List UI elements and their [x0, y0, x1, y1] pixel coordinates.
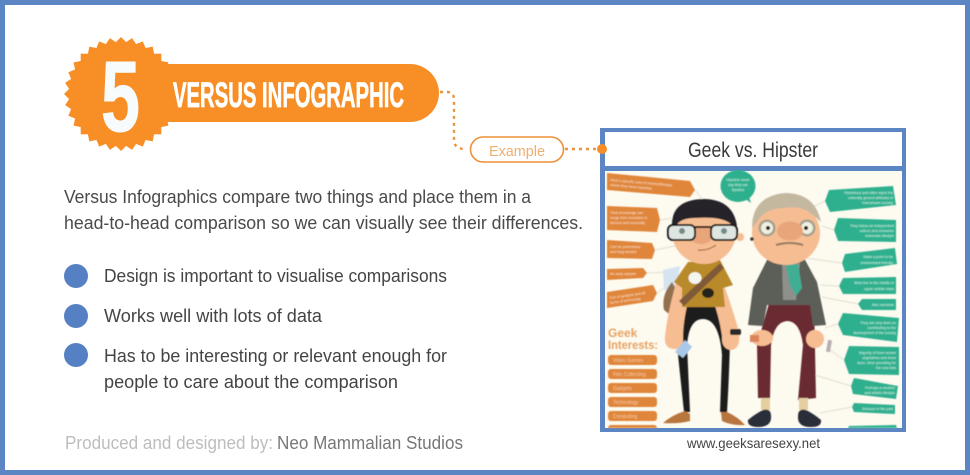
geek interests list: Geek [608, 326, 638, 340]
example pill [470, 137, 564, 162]
bullet 2: Works well with lots of data [104, 306, 323, 326]
green label text: the new kids [876, 366, 896, 370]
example frame: Geek vs. Hipster [600, 128, 906, 432]
green label text: They are very keen on [860, 321, 896, 325]
moustache [776, 243, 803, 245]
phone [675, 340, 692, 358]
geek interests list: Gadgets [613, 386, 632, 392]
geek character [663, 199, 745, 425]
speech bubble: Hipsters never [726, 178, 750, 182]
left arm and hand [665, 283, 690, 349]
geek interests list: Computing [613, 414, 637, 420]
green label text: keen, other providing for [857, 361, 897, 365]
orange label text: range from mundane to [610, 216, 647, 220]
orange label text: forms of technology [610, 297, 641, 305]
green label text: Arts overdose [872, 303, 894, 307]
title text: VERSUS INFOGRAPHIC [173, 76, 404, 115]
orange label text: Their knowledge can [610, 211, 643, 215]
orange label text: Can be pretentious [610, 245, 641, 249]
green label text: bohemian lifestyle [865, 234, 894, 238]
green label text: Make a point to be [863, 255, 893, 259]
speech bubble: say they are [728, 183, 748, 187]
green label text: contributing to the [867, 326, 896, 330]
earring [750, 237, 754, 241]
green label text: development of the society [853, 331, 896, 335]
example source url: www.geeksaresexy.net [686, 435, 820, 451]
orange geek labels [607, 173, 695, 308]
starburst badge [64, 37, 178, 151]
example pill: Example [489, 143, 545, 160]
speech bubble: hipsters [732, 188, 744, 192]
bullet 2 [64, 304, 323, 328]
dotted connector from pill to example frame [565, 148, 597, 150]
hair [752, 193, 821, 228]
green label text: Dresses in the past [862, 407, 893, 411]
legs [677, 305, 730, 412]
intro paragraph: head-to-head comparison so we can visually see their differences. [64, 213, 583, 233]
credit line: Neo Mammalian Studios [277, 433, 463, 453]
green label text: mainstream society [862, 201, 893, 205]
shirt [674, 260, 733, 307]
orange label text: famous and unusually [610, 221, 645, 225]
orange label text [610, 178, 672, 305]
credit line: Produced and designed by: [65, 433, 273, 453]
orange label text: An early adopter [610, 272, 637, 276]
geek interests list: Film Collecting [613, 372, 646, 378]
shoes [748, 410, 771, 427]
intro paragraph: Versus Infographics compare two things and place them in a [64, 187, 532, 207]
green hipster labels [825, 186, 899, 428]
bag and tablet [663, 266, 680, 290]
bullet list [64, 264, 447, 392]
orange label text: Fan of gadgets and all [610, 291, 646, 300]
green label text: Portrays a creative [865, 386, 895, 390]
green label text: vegetables and show [862, 356, 896, 360]
green label text: culture and consumer [859, 229, 895, 233]
speech bubble [720, 170, 756, 203]
green label text: They follow an independent [850, 224, 894, 228]
bullet 1: Design is important to visualise comparisons [104, 266, 447, 286]
credit line [65, 433, 463, 453]
green label text: culturally ground attitudes of [848, 196, 893, 200]
green label text: Most live in the middle or [854, 281, 895, 285]
bullet 3 [64, 343, 447, 392]
watch [730, 329, 741, 335]
example title: Geek vs. Hipster [688, 139, 818, 162]
orange label text: and long-winded [610, 250, 636, 254]
badge number: 5 [101, 41, 140, 153]
intro paragraph [64, 187, 583, 233]
title bar [130, 64, 439, 122]
green label text: Majority of them review [859, 351, 896, 355]
hair [672, 199, 737, 226]
shoes [663, 411, 690, 423]
green label text: and artistic lifestyle [865, 391, 895, 395]
right arm and hand [712, 285, 739, 350]
pants [757, 300, 816, 400]
illustration artwork [607, 170, 899, 428]
green label text [844, 191, 897, 411]
geek interests list: Technology [613, 400, 639, 406]
hands [751, 330, 773, 346]
green label text: environment friendly [861, 261, 893, 265]
geek interests list [608, 326, 658, 428]
hipster character [748, 193, 832, 427]
bullet 3: Has to be interesting or relevant enough for [104, 346, 447, 366]
orange label text: Have a specific area of interest/lifestyle [610, 178, 672, 187]
orange label text: where they have expertise [610, 183, 652, 191]
nose [689, 226, 713, 244]
geek interests list: Interests: [608, 338, 658, 352]
t-shirt and scarf [782, 263, 800, 300]
strap and panda [679, 263, 724, 306]
header: number badge and title bar [64, 37, 439, 153]
mouth [698, 245, 716, 250]
nose [777, 222, 803, 240]
socks [761, 398, 770, 410]
eyes [758, 220, 776, 236]
green label text: upper middle class [864, 287, 894, 291]
dotted connector from title to example pill [440, 92, 465, 149]
connector lines [647, 190, 858, 413]
frame connector dot [597, 144, 607, 154]
bullet 3: people to care about the comparison [104, 372, 398, 392]
jacket [748, 258, 826, 326]
head [672, 200, 736, 264]
glasses [668, 225, 737, 240]
geek interests list: Video Games [613, 358, 644, 364]
green label text: Rebellious and often reject the [844, 191, 893, 195]
item [826, 340, 832, 352]
head [752, 201, 820, 265]
